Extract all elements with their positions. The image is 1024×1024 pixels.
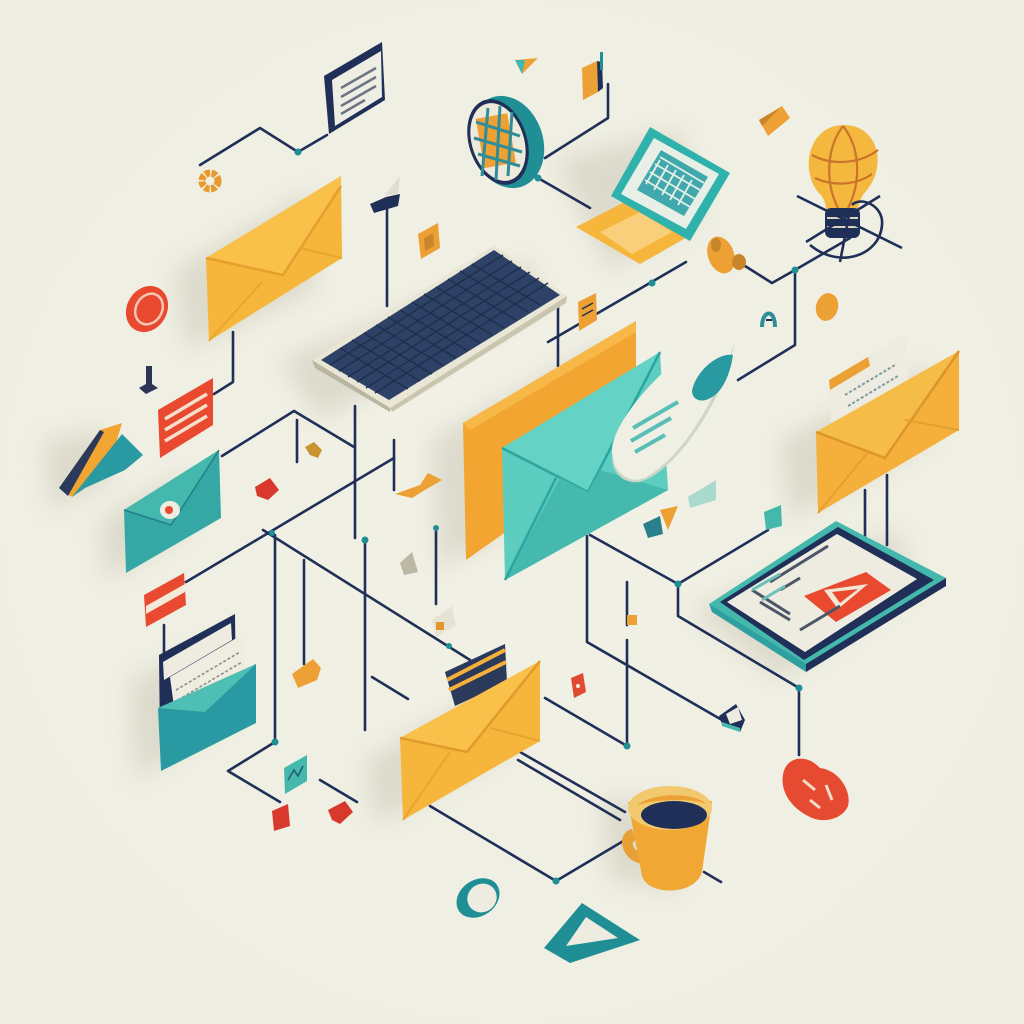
laptop	[576, 127, 730, 264]
magnifier globe	[457, 86, 556, 198]
icon: small figure	[139, 366, 158, 394]
folder: teal and orange left	[59, 423, 143, 497]
icon: teal chips near envelope	[643, 480, 782, 538]
icon: clipboard	[578, 293, 597, 331]
tablet	[709, 521, 946, 672]
icon: orange block	[292, 659, 321, 688]
icon: small cube	[418, 223, 440, 259]
icon: small orange gear	[759, 106, 790, 136]
icon: teal ring	[449, 870, 507, 926]
icon: document top	[324, 42, 385, 134]
icon: teal card	[284, 755, 307, 794]
connector lines	[164, 84, 887, 882]
icon: red target	[118, 278, 176, 340]
icon: red list card	[158, 378, 213, 458]
icon: red tag small	[571, 673, 586, 698]
coffee mug	[622, 786, 712, 891]
icon: tiny orange marker	[627, 615, 637, 625]
icon: teal triangle frame	[544, 903, 640, 963]
icon: teal glyph	[762, 313, 775, 327]
light bulb	[797, 125, 902, 262]
envelope: right with letter	[816, 334, 959, 513]
icon: tiny prism	[515, 58, 538, 74]
icon: small tan parts	[305, 442, 442, 575]
icon: small device	[719, 704, 745, 732]
folder: open letter teal	[158, 614, 256, 771]
keyboard	[312, 245, 567, 412]
envelope: top left yellow	[206, 176, 342, 341]
envelope: central teal	[502, 352, 668, 580]
icon: red flag card	[144, 573, 186, 627]
icon: small red cubes	[272, 801, 353, 831]
icon: desk lamp	[370, 176, 400, 213]
icon: orange dot	[813, 291, 841, 323]
icon: small gear	[202, 173, 218, 189]
icon: red gear badge	[783, 759, 849, 820]
icon: red cube	[255, 478, 279, 500]
envelope: small teal	[124, 450, 221, 573]
icon: battery block	[582, 52, 603, 100]
icon: orange knob	[702, 233, 746, 277]
envelope: bottom yellow	[400, 644, 540, 820]
envelope: central orange back	[463, 321, 636, 560]
soft shadows	[45, 130, 930, 890]
letter bubble	[612, 338, 734, 482]
icon: paper clip tag	[432, 606, 456, 637]
